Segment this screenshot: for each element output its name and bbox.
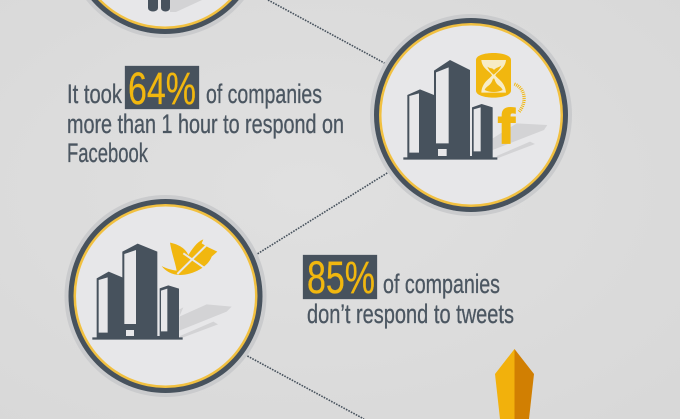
stat: 85%: 85% <box>307 252 375 303</box>
icon: buildings with Facebook and hourglass <box>403 53 547 160</box>
icon: building shadow remnant <box>170 0 202 12</box>
highlight box: 85% <box>303 255 377 299</box>
building shadow <box>179 304 232 338</box>
buildings <box>403 60 497 160</box>
connector: Twitter circle to bottom <box>240 352 364 419</box>
icon: Facebook f: f <box>498 100 515 154</box>
text: It took: It took <box>67 79 122 109</box>
connector: top circle to Facebook circle <box>268 0 388 65</box>
panel: top circle remnant <box>64 0 266 38</box>
building windows <box>99 250 167 336</box>
icon: Twitter bird <box>162 239 217 275</box>
icon: figure legs <box>148 0 170 12</box>
text block: 64% Facebook statistic <box>67 63 344 168</box>
arrow: pointed tip <box>495 349 534 419</box>
building windows <box>409 67 481 156</box>
text: of companies: of companies <box>383 269 500 299</box>
icon: dotted arc <box>514 84 524 112</box>
buildings <box>92 244 183 340</box>
text: don't respond to tweets: don’t respond to tweets <box>307 299 514 329</box>
panel: Twitter circle <box>64 195 266 397</box>
highlight box: 64% <box>125 66 199 109</box>
connector: Facebook circle to Twitter circle <box>254 170 392 256</box>
icon: hourglass <box>476 53 511 98</box>
panel: Facebook circle <box>370 14 572 216</box>
text block: 85% tweets statistic <box>303 252 514 329</box>
text: more than 1 hour: more than 1 hour to respond on <box>67 109 344 139</box>
text: of companies: of companies <box>206 79 322 109</box>
stat: 64%: 64% <box>128 63 196 114</box>
building shadow <box>493 123 547 158</box>
icon: buildings with Twitter bird <box>92 239 232 340</box>
text: Facebook: Facebook <box>67 138 148 168</box>
